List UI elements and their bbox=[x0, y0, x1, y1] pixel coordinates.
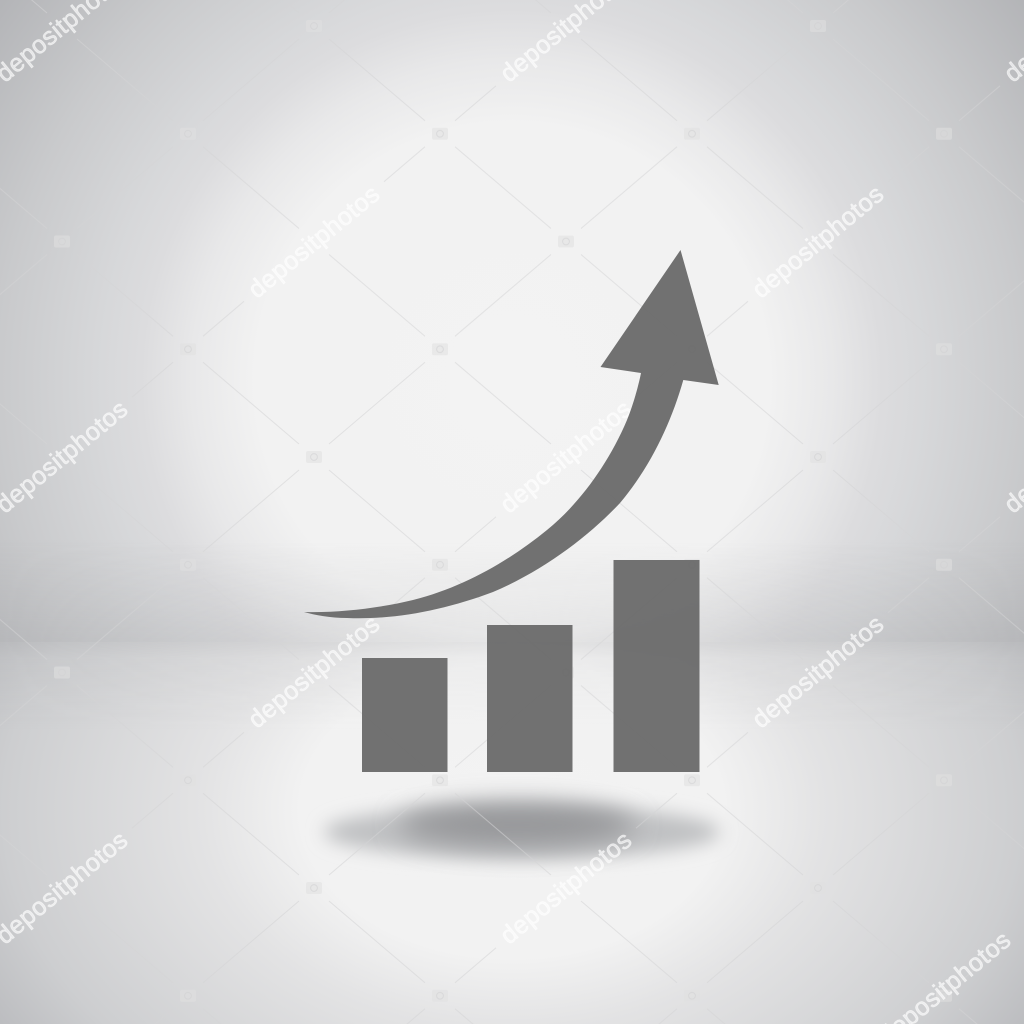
bar 1 bbox=[362, 658, 448, 772]
floating shadow under chart bbox=[324, 803, 720, 859]
watermark text: depositphotos bbox=[747, 180, 889, 304]
watermark text: depositphotos bbox=[495, 395, 637, 519]
watermark text: depositphotos bbox=[747, 610, 889, 734]
watermark text: depositphotos bbox=[243, 180, 385, 304]
watermark text: depositphotos bbox=[243, 610, 385, 734]
bar chart bbox=[362, 560, 700, 772]
bar 3 bbox=[614, 560, 700, 772]
watermark text: depositphotos bbox=[495, 826, 637, 950]
bar 2 bbox=[487, 625, 572, 772]
rising arrow bbox=[304, 250, 719, 618]
